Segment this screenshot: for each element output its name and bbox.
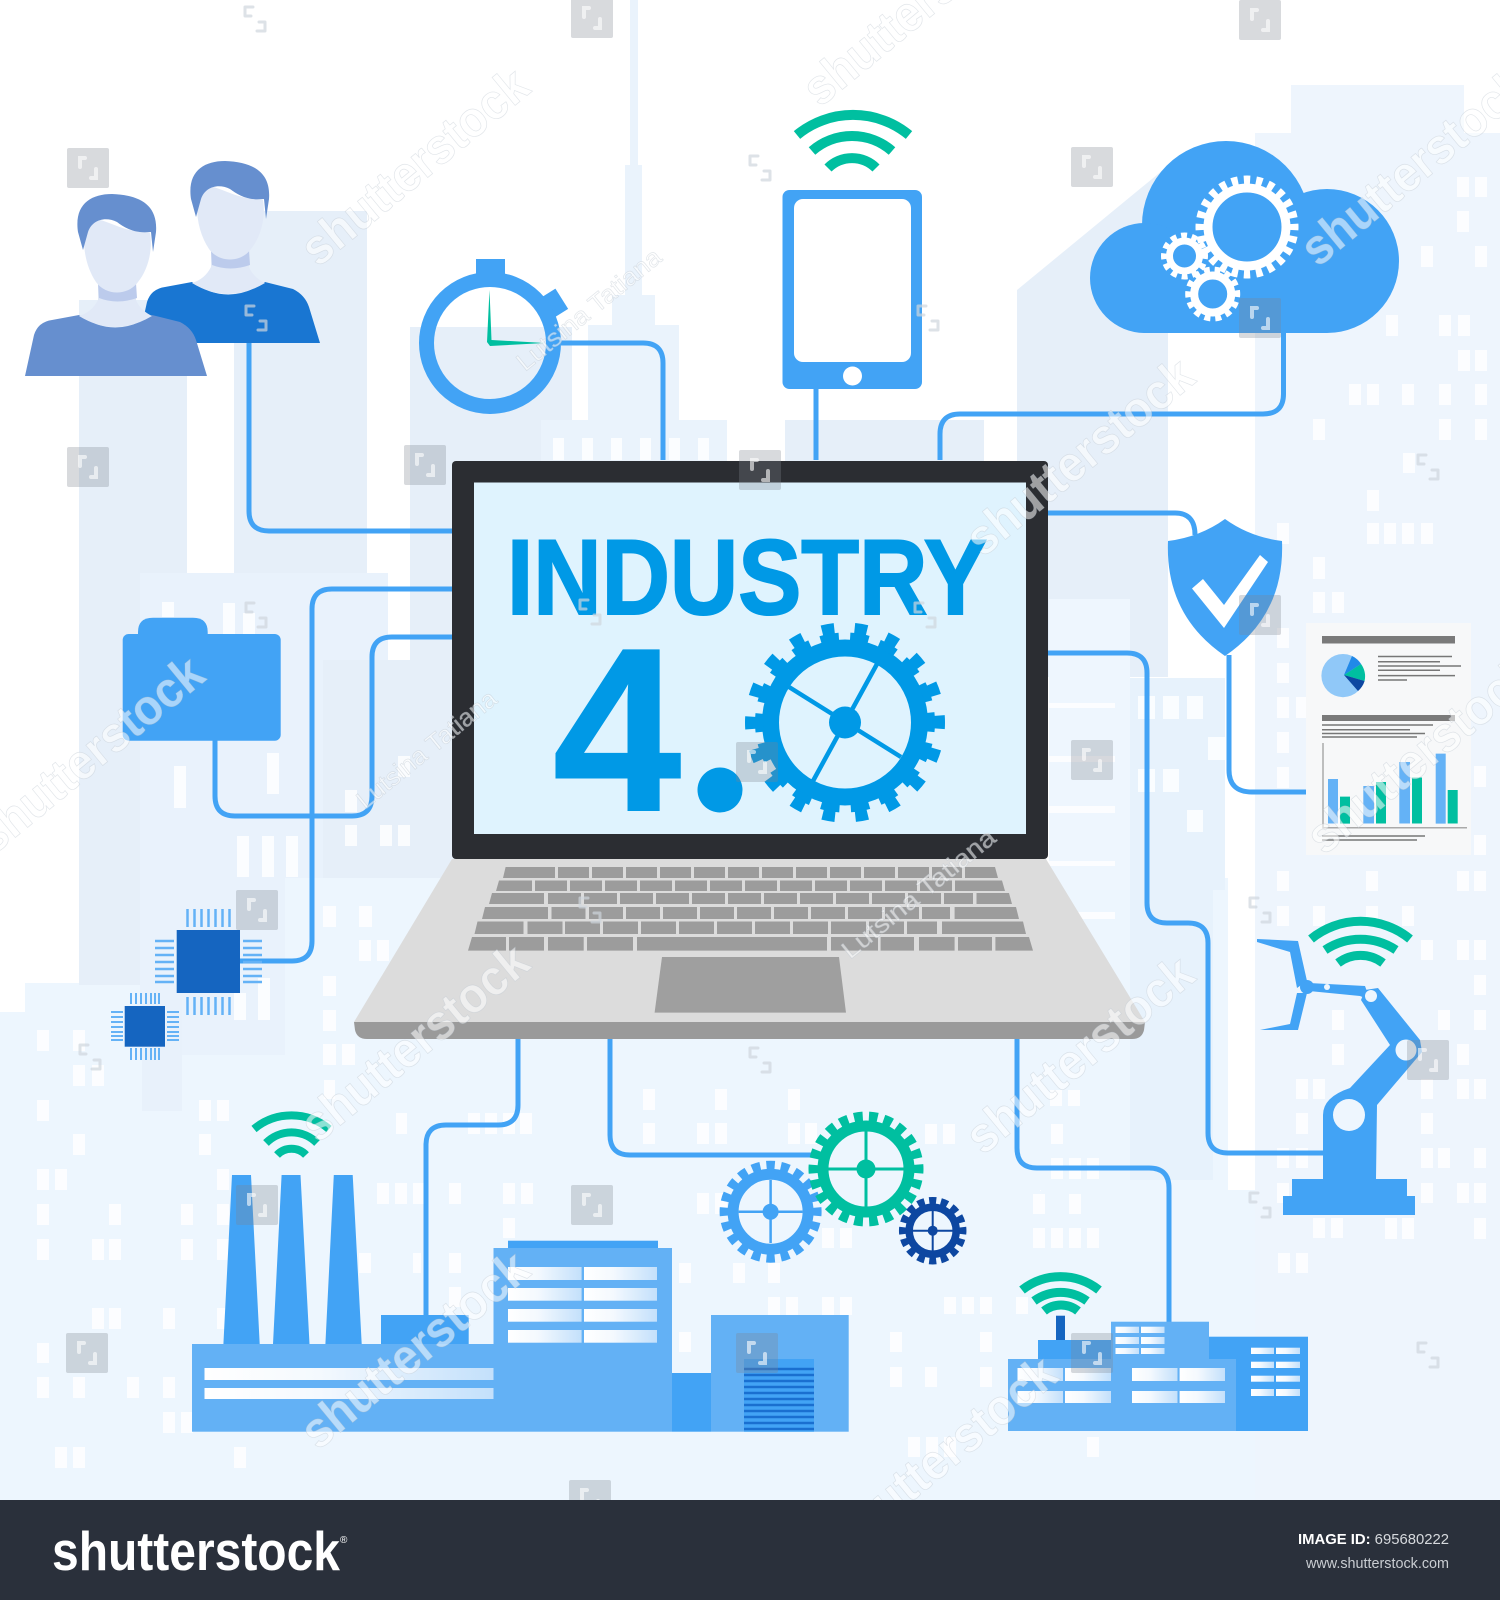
laptop base xyxy=(354,859,1145,1039)
icon: security shield xyxy=(1168,519,1282,656)
trackpad xyxy=(655,957,846,1013)
laptop xyxy=(354,461,1145,1039)
heading: version number 4: 4 xyxy=(553,601,681,860)
icon: wifi above phone xyxy=(797,115,909,168)
icon: blue gear xyxy=(725,1166,817,1258)
illustration: factory xyxy=(192,1175,849,1432)
icon: stopwatch xyxy=(426,259,568,406)
illustration: connected plant xyxy=(1008,1316,1308,1431)
icon: green gear xyxy=(814,1117,918,1221)
icon: cloud with gears xyxy=(1090,141,1399,333)
keyboard xyxy=(468,867,1033,951)
icon: robot arm xyxy=(1257,939,1422,1215)
icon: two people xyxy=(25,161,320,376)
connector lines xyxy=(215,333,1323,1325)
icon: wifi above robot xyxy=(1311,921,1410,963)
watermark text: shutterstock xyxy=(289,932,540,1152)
bar chart xyxy=(1323,743,1467,828)
laptop bezel xyxy=(452,461,1048,859)
icon: small microchip xyxy=(111,993,179,1060)
watermark text: shutterstock xyxy=(817,1344,1068,1564)
icon: wifi above plant xyxy=(1022,1277,1099,1311)
gear forming the zero xyxy=(751,628,939,816)
watermark text: Lutsina Tatiana xyxy=(836,823,1002,965)
watermark text: shutterstock xyxy=(954,944,1205,1164)
watermark text: Lutsina Tatiana xyxy=(511,243,667,377)
footer url: www.shutterstock.com xyxy=(1305,1555,1449,1572)
footer logo: shutterstock xyxy=(52,1520,340,1582)
background building windows xyxy=(37,177,1487,1468)
watermark text: shutterstock xyxy=(954,346,1205,566)
icon: navy gear xyxy=(903,1201,963,1261)
footer registered mark: ® xyxy=(340,1535,348,1546)
icon: folder xyxy=(123,618,281,741)
icon: wifi above factory xyxy=(254,1115,329,1155)
watermark text: Lutsina Tatiana xyxy=(351,685,503,815)
pie chart xyxy=(1321,654,1365,697)
footer image id: IMAGE ID: 695680222 xyxy=(1298,1531,1449,1548)
icon: smartphone xyxy=(782,190,922,389)
panel: data report xyxy=(1306,623,1471,855)
watermark text: shutterstock xyxy=(289,1239,540,1459)
laptop screen xyxy=(474,482,1026,834)
heading: INDUSTRY: INDUSTRY xyxy=(507,517,987,637)
watermark text: shutterstock xyxy=(289,56,540,276)
version dot xyxy=(698,768,742,812)
footer bar xyxy=(0,1500,1500,1600)
icon: large microchip xyxy=(155,909,262,1015)
